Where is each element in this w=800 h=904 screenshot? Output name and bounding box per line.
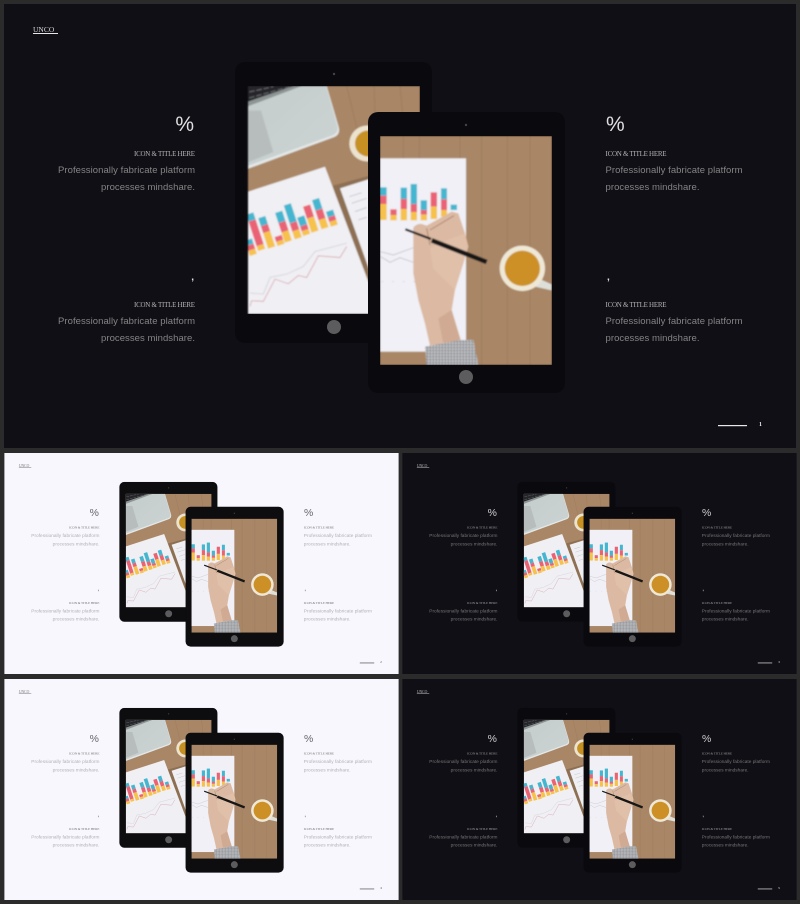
text block: bottom right: processes mindshare. — [304, 617, 351, 623]
text block: bottom right: Professionally fabricate platform — [702, 608, 770, 614]
text block: top right: Professionally fabricate platform — [304, 533, 372, 539]
text block: top right: Professionally fabricate platform — [606, 165, 743, 176]
text block: bottom right: ICON & TITLE HERE — [606, 301, 666, 309]
text block: bottom right — [304, 813, 372, 849]
text block: top left: processes mindshare. — [451, 768, 497, 774]
text block: bottom right: Professionally fabricate platform — [304, 834, 372, 840]
text block: bottom left: , — [496, 587, 498, 592]
text block: top right: processes mindshare. — [304, 768, 351, 774]
text block: top right: ICON & TITLE HERE — [304, 752, 334, 756]
text block: bottom left: ICON & TITLE HERE — [467, 601, 497, 605]
text block: bottom left: processes mindshare. — [53, 617, 99, 623]
slide 5: small dark slide, bottom right — [402, 679, 796, 900]
text block: bottom left: Professionally fabricate platform — [31, 608, 100, 614]
text block: top right — [702, 508, 770, 548]
page number — [758, 660, 780, 664]
text block: bottom left: processes mindshare. — [451, 843, 497, 849]
text block: top right: ICON & TITLE HERE — [702, 752, 732, 756]
text block: top left: processes mindshare. — [101, 182, 195, 193]
text block: top right — [606, 113, 743, 193]
text block: top left: processes mindshare. — [53, 768, 99, 774]
text block: top right: ICON & TITLE HERE — [606, 150, 666, 158]
text block: top left: ICON & TITLE HERE — [134, 150, 195, 158]
text block: bottom right: ICON & TITLE HERE — [702, 827, 732, 831]
text block: top left — [429, 734, 498, 774]
page number — [718, 422, 762, 428]
text block: top left: Professionally fabricate platform — [429, 759, 498, 765]
logo: UNCO: UNCO — [417, 464, 428, 468]
text block: bottom right: Professionally fabricate platform — [702, 834, 770, 840]
text block: top right: processes mindshare. — [702, 542, 749, 548]
text block: top right: % — [606, 113, 625, 136]
text block: top left: Professionally fabricate platform — [31, 759, 100, 765]
text block: top left: % — [90, 734, 99, 745]
text block: top left — [429, 508, 498, 548]
tablets with desk photos — [119, 708, 284, 873]
text block: bottom left: , — [191, 272, 194, 283]
text block: top left — [58, 113, 195, 193]
text block: top right: % — [304, 734, 313, 745]
text block: top right: % — [304, 508, 313, 519]
text block: top right: Professionally fabricate platform — [702, 759, 770, 765]
page number: 1 — [759, 422, 762, 428]
text block: bottom left: ICON & TITLE HERE — [69, 601, 99, 605]
page number: 4 — [380, 886, 382, 890]
text block: bottom right — [702, 587, 770, 623]
text block: bottom right: , — [703, 587, 705, 592]
text block: top left: ICON & TITLE HERE — [69, 526, 99, 530]
text block: bottom right: ICON & TITLE HERE — [304, 827, 334, 831]
slide 2: small light slide, top left — [4, 453, 399, 674]
tablets with desk photos — [235, 62, 565, 393]
text block: bottom right: processes mindshare. — [702, 617, 749, 623]
text block: bottom left — [31, 813, 100, 849]
text block: top right — [702, 734, 770, 774]
text block: bottom right: Professionally fabricate platform — [304, 608, 372, 614]
text block: top left: Professionally fabricate platform — [429, 533, 498, 539]
text block: top right: % — [702, 734, 711, 745]
text block: top left: Professionally fabricate platform — [31, 533, 100, 539]
page number — [758, 886, 780, 890]
text block: bottom right — [606, 272, 743, 344]
page number: 2 — [380, 660, 382, 664]
slide 4: small light slide, bottom left — [4, 679, 399, 900]
text block: bottom right: , — [607, 272, 610, 283]
text block: bottom left: Professionally fabricate platform — [429, 834, 498, 840]
text block: top right: processes mindshare. — [304, 542, 351, 548]
text block: bottom left: ICON & TITLE HERE — [467, 827, 497, 831]
text block: bottom left: ICON & TITLE HERE — [69, 827, 99, 831]
text block: bottom left — [429, 587, 498, 623]
text block: bottom left: , — [98, 587, 100, 592]
text block: bottom right: ICON & TITLE HERE — [304, 601, 334, 605]
text block: top left: % — [488, 734, 497, 745]
text block: bottom right — [702, 813, 770, 849]
text block: bottom left: processes mindshare. — [451, 617, 497, 623]
text block: bottom left: processes mindshare. — [101, 333, 195, 344]
text block: bottom left — [58, 272, 195, 344]
text block: bottom left: processes mindshare. — [53, 843, 99, 849]
text block: top right — [304, 734, 372, 774]
text block: bottom right: processes mindshare. — [702, 843, 749, 849]
text block: bottom left: ICON & TITLE HERE — [134, 301, 195, 309]
tablets with desk photos — [119, 482, 284, 647]
text block: top right: ICON & TITLE HERE — [702, 526, 732, 530]
logo: UNCO: UNCO — [417, 690, 428, 694]
text block: bottom left: , — [98, 813, 100, 818]
logo: UNCO: UNCO — [19, 464, 30, 468]
text block: bottom left: Professionally fabricate platform — [429, 608, 498, 614]
text block: bottom right: processes mindshare. — [304, 843, 351, 849]
text block: bottom right: , — [305, 587, 307, 592]
text block: top left: Professionally fabricate platform — [58, 165, 195, 176]
tablets with desk photos — [517, 482, 682, 647]
page number — [360, 660, 382, 664]
text block: bottom left — [31, 587, 100, 623]
text block: top left — [31, 508, 100, 548]
text block: top left: processes mindshare. — [53, 542, 99, 548]
logo: UNCO: UNCO — [33, 25, 55, 34]
text block: bottom right: Professionally fabricate platform — [606, 316, 743, 327]
text block: top right: ICON & TITLE HERE — [304, 526, 334, 530]
text block: top left: processes mindshare. — [451, 542, 497, 548]
text block: top left: ICON & TITLE HERE — [467, 752, 497, 756]
text block: bottom left: Professionally fabricate platform — [31, 834, 100, 840]
text block: bottom right: ICON & TITLE HERE — [702, 601, 732, 605]
page number — [360, 886, 382, 890]
text block: bottom left — [429, 813, 498, 849]
page number: 3 — [778, 660, 780, 664]
text block: top right: % — [702, 508, 711, 519]
text block: top left: % — [90, 508, 99, 519]
text block: top left: % — [175, 113, 194, 136]
text block: top left: ICON & TITLE HERE — [467, 526, 497, 530]
text block: bottom left: Professionally fabricate platform — [58, 316, 195, 327]
text block: bottom right: processes mindshare. — [606, 333, 700, 344]
text block: bottom right: , — [305, 813, 307, 818]
text block: top right: processes mindshare. — [606, 182, 700, 193]
text block: bottom left: , — [496, 813, 498, 818]
text block: top right: Professionally fabricate platform — [304, 759, 372, 765]
text block: top left — [31, 734, 100, 774]
logo: UNCO: UNCO — [19, 690, 30, 694]
text block: top right: processes mindshare. — [702, 768, 749, 774]
text block: bottom right — [304, 587, 372, 623]
text block: top right — [304, 508, 372, 548]
tablets with desk photos — [517, 708, 682, 873]
slide 1: large dark slide — [4, 4, 796, 448]
text block: bottom right: , — [703, 813, 705, 818]
text block: top left: ICON & TITLE HERE — [69, 752, 99, 756]
text block: top left: % — [488, 508, 497, 519]
page number: 5 — [778, 886, 780, 890]
slide 3: small dark slide, top right — [402, 453, 796, 674]
text block: top right: Professionally fabricate platform — [702, 533, 770, 539]
